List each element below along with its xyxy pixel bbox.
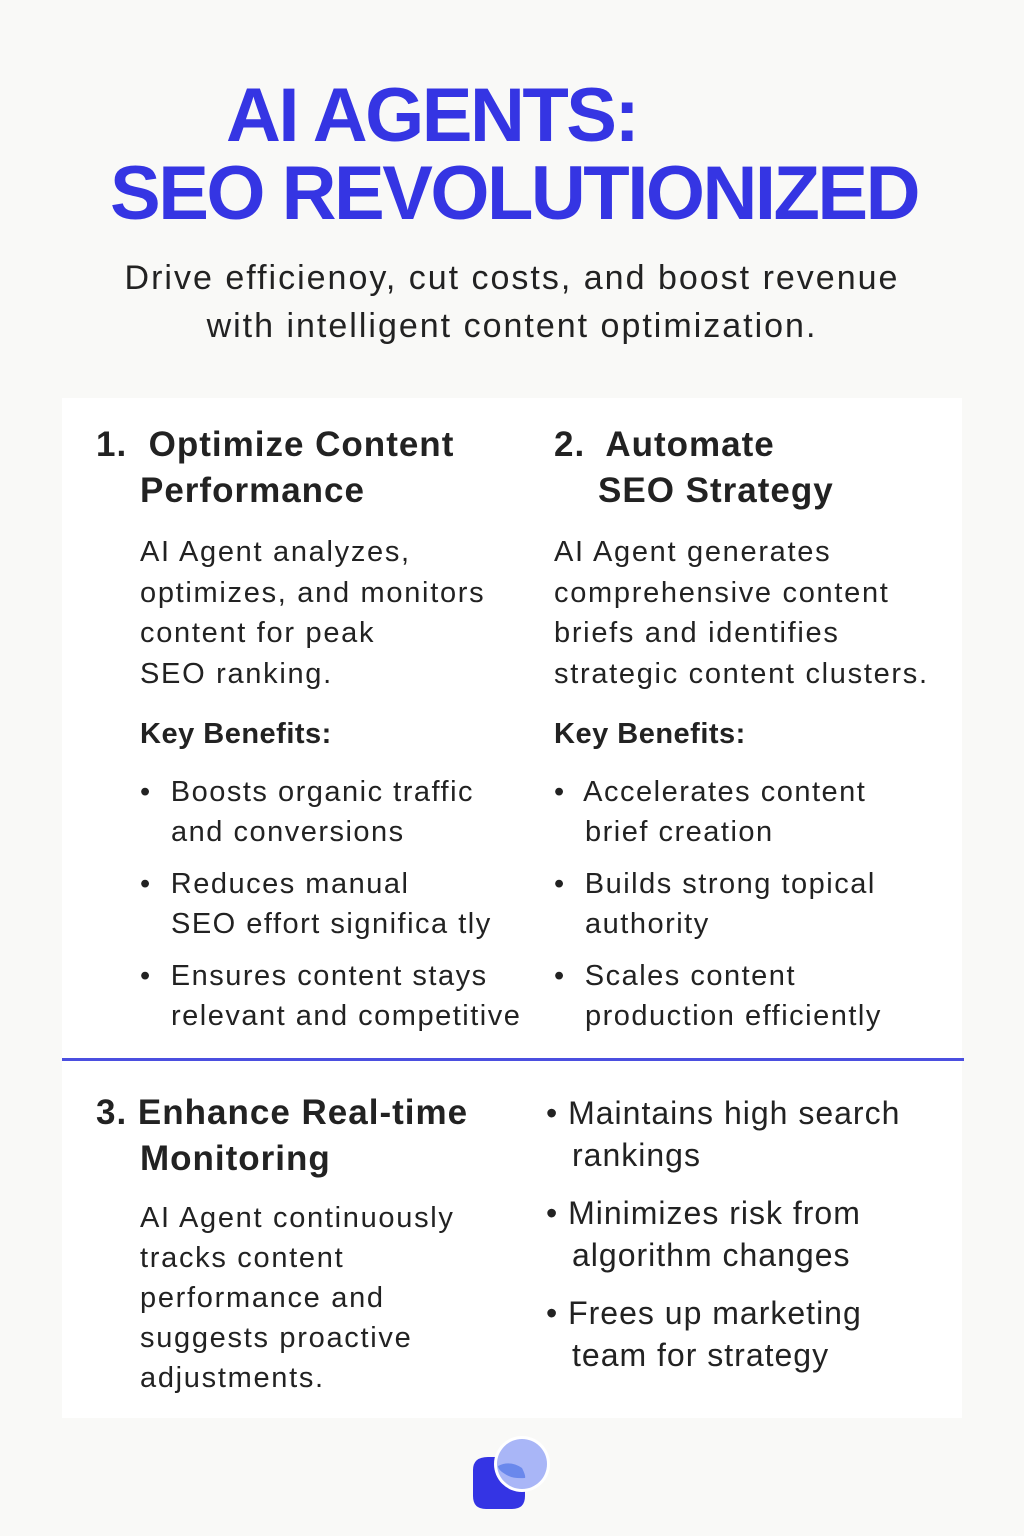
heading 1: Performance — [140, 471, 365, 510]
description 3: AI Agent continuously — [140, 1202, 455, 1234]
benefits list 1: • Reduces manual — [140, 868, 409, 900]
heading 1: 1. Optimize Content — [96, 425, 454, 464]
description 2: briefs and identifies — [554, 617, 840, 649]
subtitle — [125, 259, 899, 345]
panel 3 benefits: rankings — [572, 1137, 701, 1173]
description 3: suggests proactive — [140, 1322, 412, 1354]
panel 3 benefits: algorithm changes — [572, 1237, 850, 1273]
key benefits 2: Key Benefits: — [554, 718, 746, 750]
description 1: optimizes, and monitors — [140, 576, 485, 608]
benefits list 2: • Scales content — [554, 960, 796, 992]
panel 3 benefits: • Frees up marketing — [546, 1295, 862, 1331]
title — [110, 73, 918, 236]
title: AI AGENTS: — [226, 73, 637, 158]
panel 3 — [96, 1093, 468, 1394]
benefits list 1: and conversions — [171, 816, 405, 848]
benefits list 2: brief creation — [585, 816, 774, 848]
heading 3 — [96, 1093, 468, 1178]
benefits list 1: • Ensures content stays — [140, 960, 488, 992]
description 1 — [140, 536, 485, 690]
description 2 — [554, 536, 929, 690]
description 3: tracks content — [140, 1242, 344, 1274]
description 3: adjustments. — [140, 1362, 325, 1394]
subtitle: with intelligent content optimization. — [207, 307, 817, 345]
description 1: content for peak — [140, 617, 375, 649]
logo icon — [473, 1439, 547, 1509]
heading 2: 2. Automate — [554, 425, 775, 464]
subtitle: Drive efficienoy, cut costs, and boost revenue — [125, 259, 899, 297]
description 1: SEO ranking. — [140, 658, 333, 690]
description 2: strategic content clusters. — [554, 658, 929, 690]
heading 2 — [554, 425, 834, 510]
description 2: AI Agent generates — [554, 536, 831, 568]
benefits list 1 — [140, 776, 521, 1032]
panel 3 benefits: • Maintains high search — [546, 1095, 900, 1131]
title: SEO REVOLUTIONIZED — [110, 151, 918, 236]
benefits list 2 — [554, 776, 882, 1032]
panel 3 benefits: • Minimizes risk from — [546, 1195, 861, 1231]
heading 3: 3. Enhance Real-time — [96, 1093, 468, 1132]
benefits list 1: SEO effort significa tly — [171, 908, 492, 940]
heading 1 — [96, 425, 454, 510]
panel 3 benefits — [546, 1095, 900, 1373]
panel 1 — [96, 425, 521, 1032]
heading 3: Monitoring — [140, 1139, 331, 1178]
benefits list 2: authority — [585, 908, 710, 940]
description 3: performance and — [140, 1282, 385, 1314]
panel 3 benefits: team for strategy — [572, 1337, 829, 1373]
benefits list 2: • Builds strong topical — [554, 868, 876, 900]
panel 2 — [554, 425, 929, 1032]
description 2: comprehensive content — [554, 576, 890, 608]
benefits list 2: production efficiently — [585, 1000, 882, 1032]
benefits list 2: • Accelerates content — [554, 776, 866, 808]
benefits list 1: • Boosts organic traffic — [140, 776, 474, 808]
benefits list 1: relevant and competitive — [171, 1000, 521, 1032]
description 1: AI Agent analyzes, — [140, 536, 411, 568]
key benefits 1: Key Benefits: — [140, 718, 332, 750]
heading 2: SEO Strategy — [598, 471, 834, 510]
description 3 — [140, 1202, 455, 1394]
main panel — [62, 398, 962, 1418]
